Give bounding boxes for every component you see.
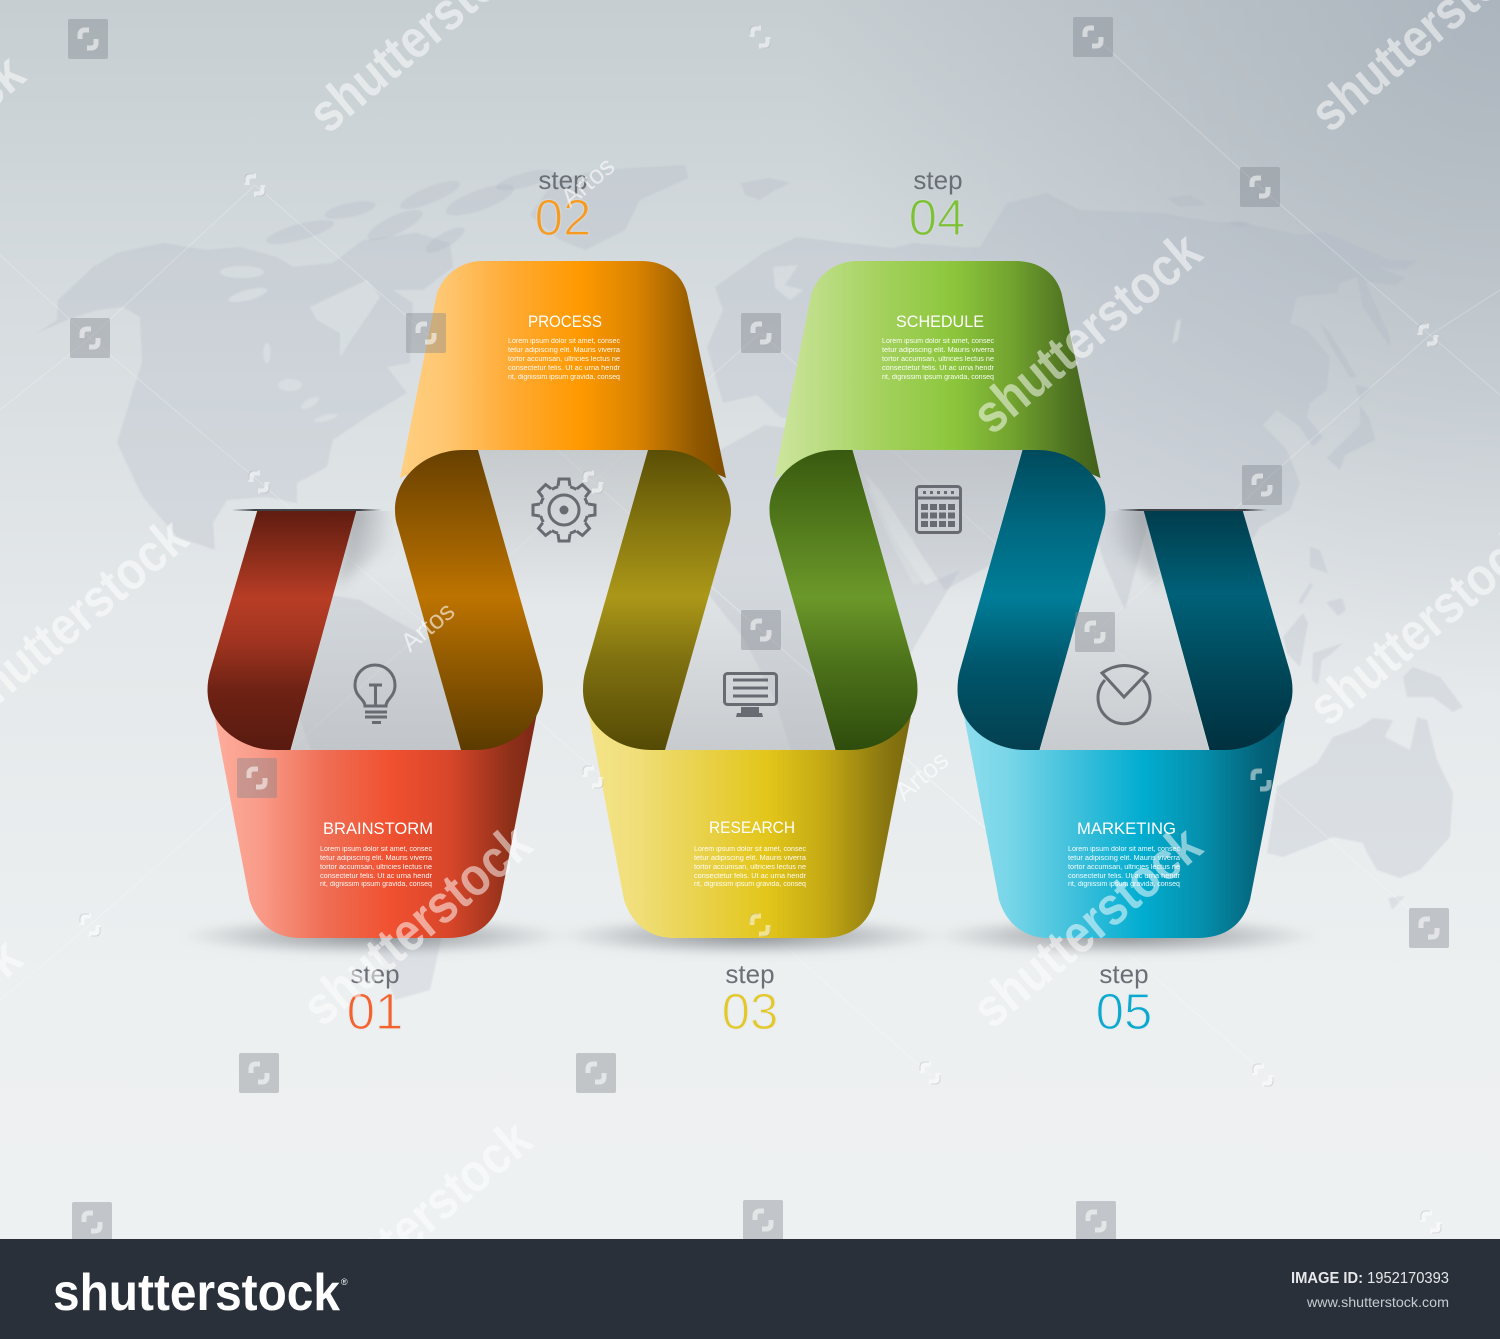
icon: gear bbox=[533, 479, 595, 541]
step 4: schedule band bbox=[774, 261, 1100, 478]
text block: schedule: SCHEDULE bbox=[896, 312, 984, 331]
text block: marketing: consectetur felis. Ut ac urna hendr bbox=[1068, 873, 1181, 880]
text block: process: rit, dignissim ipsum gravida, conseq bbox=[508, 374, 620, 381]
footer logo: shutterstock bbox=[53, 1264, 340, 1322]
text block: schedule: consectetur felis. Ut ac urna hendr bbox=[882, 365, 995, 372]
watermark author text: Artos bbox=[889, 745, 954, 807]
text block: research bbox=[694, 818, 807, 888]
label: step 03: step bbox=[725, 959, 775, 989]
text block: schedule: tortor accumsan, ultricies lectus ne bbox=[882, 356, 994, 363]
text block: process bbox=[508, 312, 621, 381]
text block: schedule: rit, dignissim ipsum gravida, conseq bbox=[882, 374, 994, 381]
ground shadows bbox=[180, 916, 1320, 956]
text block: brainstorm: consectetur felis. Ut ac urna hendr bbox=[320, 873, 433, 880]
text block: research: tetur adipiscing elit. Mauris viverra bbox=[694, 855, 806, 862]
slit lines bbox=[232, 509, 1267, 511]
world map bbox=[37, 165, 1463, 1000]
step 2: process band bbox=[400, 261, 726, 478]
watermark text: shutterstock bbox=[291, 1108, 543, 1333]
text block: process: Lorem ipsum dolor sit amet, consec bbox=[508, 338, 620, 345]
faint watermark grid lines bbox=[0, 37, 1500, 1075]
text block: brainstorm: BRAINSTORM bbox=[323, 819, 433, 838]
text block: brainstorm: tortor accumsan, ultricies lectus ne bbox=[320, 864, 432, 871]
footer url: www.shutterstock.com bbox=[1306, 1294, 1449, 1310]
text block: process: consectetur felis. Ut ac urna hendr bbox=[508, 365, 621, 372]
watermark text: shutterstock bbox=[961, 220, 1213, 445]
watermark author text bbox=[395, 151, 954, 807]
text block: research: RESEARCH bbox=[709, 818, 795, 837]
text block: process: tetur adipiscing elit. Mauris viverra bbox=[508, 347, 620, 354]
footer registered mark: ® bbox=[341, 1277, 348, 1287]
map lakes and seas bbox=[220, 265, 1181, 585]
text block: marketing: Lorem ipsum dolor sit amet, consec bbox=[1068, 846, 1180, 853]
watermark author text: Artos bbox=[395, 596, 460, 658]
watermark author text: Artos bbox=[555, 151, 620, 213]
watermark text: shutterstock bbox=[291, 812, 543, 1037]
text block: brainstorm: rit, dignissim ipsum gravida, conseq bbox=[320, 881, 432, 888]
icon: monitor bbox=[724, 674, 776, 717]
label: step 05: 05 bbox=[1096, 983, 1152, 1040]
fold: olive strip bbox=[583, 450, 731, 750]
step 5: marketing band bbox=[961, 700, 1289, 938]
footer image id: IMAGE ID: 1952170393 bbox=[1291, 1270, 1449, 1287]
label: step 03: 03 bbox=[722, 983, 778, 1040]
fold: brown strip bbox=[395, 450, 543, 750]
fold: teal strip bbox=[958, 450, 1106, 750]
label: step 02: 02 bbox=[535, 189, 591, 246]
text block: process: PROCESS bbox=[528, 312, 602, 331]
watermark text: shutterstock bbox=[961, 814, 1213, 1039]
text block: brainstorm: tetur adipiscing elit. Mauris viverra bbox=[320, 855, 432, 862]
fold: leaf green strip bbox=[770, 450, 918, 750]
text block: schedule: tetur adipiscing elit. Mauris viverra bbox=[882, 347, 994, 354]
ribbon folds bbox=[208, 450, 1292, 750]
fold: dark teal strip bbox=[1144, 510, 1292, 750]
text block: marketing: rit, dignissim ipsum gravida, conseq bbox=[1068, 881, 1180, 888]
text block: schedule bbox=[882, 312, 995, 381]
text block: brainstorm: Lorem ipsum dolor sit amet, consec bbox=[320, 846, 432, 853]
icon: pie chart bbox=[1098, 666, 1150, 724]
icon: calendar bbox=[916, 486, 960, 532]
text block: marketing: tortor accumsan, ultricies lectus ne bbox=[1068, 864, 1180, 871]
text block: research: tortor accumsan, ultricies lectus ne bbox=[694, 864, 806, 871]
label: step 01: step bbox=[350, 959, 400, 989]
fold: red strip bbox=[208, 510, 356, 750]
step 1: brainstorm band bbox=[212, 700, 540, 938]
text block: process: tortor accumsan, ultricies lectus ne bbox=[508, 356, 620, 363]
label: step 01: 01 bbox=[347, 983, 403, 1040]
inner triangle shading bbox=[291, 450, 1209, 750]
label: step 04: step bbox=[913, 165, 963, 195]
text block: marketing: tetur adipiscing elit. Mauris viverra bbox=[1068, 855, 1180, 862]
text block: brainstorm bbox=[320, 819, 433, 888]
text block: schedule: Lorem ipsum dolor sit amet, consec bbox=[882, 338, 994, 345]
text block: research: consectetur felis. Ut ac urna hendr bbox=[694, 873, 807, 880]
text block: marketing bbox=[1068, 819, 1181, 888]
text block: research: rit, dignissim ipsum gravida, conseq bbox=[694, 881, 806, 888]
footer bar bbox=[0, 1239, 1500, 1339]
text block: research: Lorem ipsum dolor sit amet, consec bbox=[694, 846, 806, 853]
label: step 02: step bbox=[538, 165, 588, 195]
icon: light bulb bbox=[355, 665, 395, 722]
label: step 04: 04 bbox=[909, 189, 965, 246]
step 3: research band bbox=[586, 700, 914, 938]
label: step 05: step bbox=[1099, 959, 1149, 989]
text block: marketing: MARKETING bbox=[1077, 819, 1176, 838]
